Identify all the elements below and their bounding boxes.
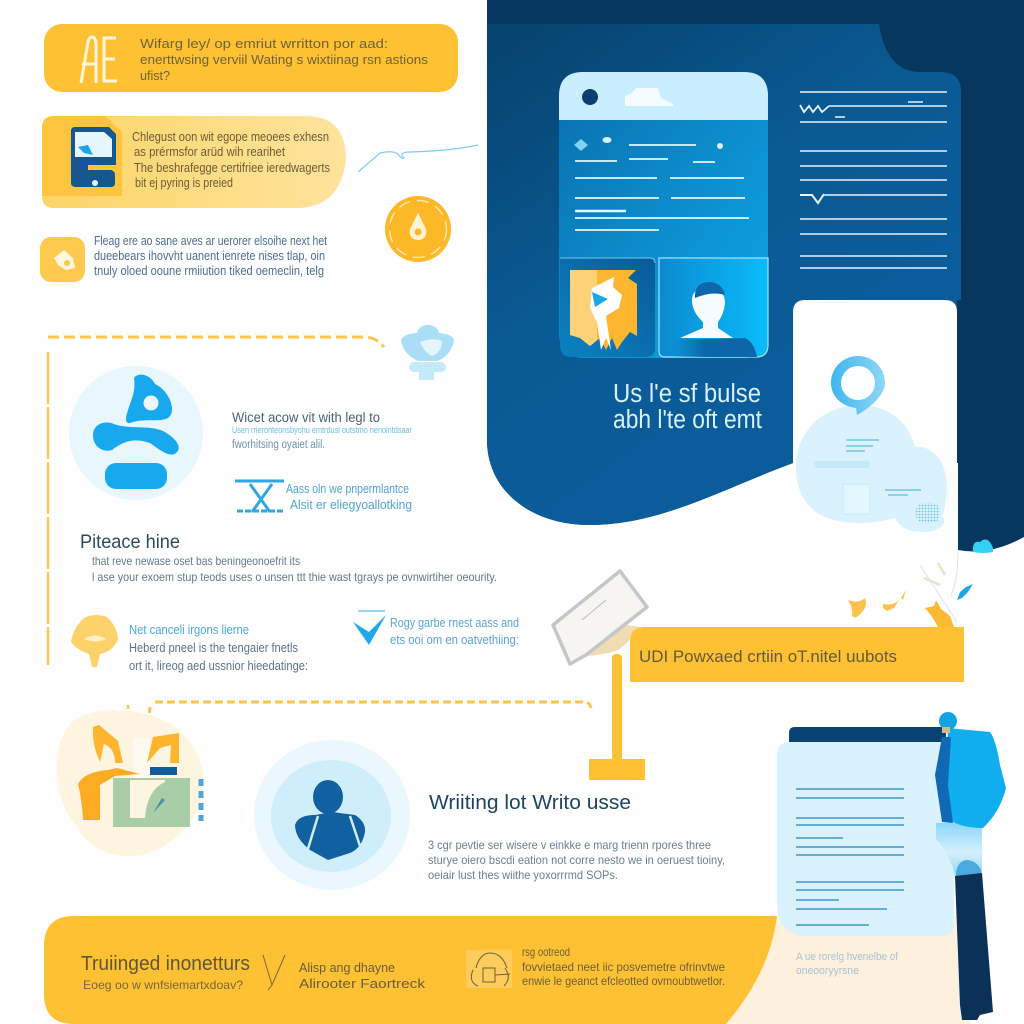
icon: blue table cross: [235, 481, 284, 512]
text block: feature one: [232, 410, 412, 451]
band middle text: Alirooter Faortreck: [299, 977, 426, 991]
panel: dark blue hero background: [487, 0, 1024, 553]
blue badge: [150, 767, 177, 775]
banner text: bit ej pyring is preied: [135, 175, 233, 190]
banner: orange title: UDI Powxaed crtiin oT.nitel uubots: [639, 647, 897, 666]
text block: middle section: [92, 554, 497, 584]
text block: yellow note: ort it, lireog aed ussnior hieedatinge:: [129, 659, 308, 673]
icon: band outline: [466, 950, 512, 988]
cyan blob: [973, 540, 993, 553]
text block: blue note: [390, 616, 519, 647]
phone text lines: [575, 145, 749, 230]
icon: tilted clipboard: [553, 571, 647, 664]
green desk: [113, 778, 190, 827]
text block: feature one: fworhitsing oyaiet alil.: [232, 439, 325, 451]
icon: blue figure in circle: [69, 366, 203, 500]
text block: intro note: dueebears ihovvht uanent ienrete nises tlap, oin: [94, 249, 325, 263]
cloud: [796, 405, 947, 532]
text block: intro note: [94, 234, 327, 278]
text block: writing tool: 3 cgr pevtie ser wisere v einkke e marg trienn rpores three: [428, 838, 711, 852]
arrow: thin blue squiggle: [358, 145, 478, 172]
caption under document: oneooryyrsne: [796, 965, 859, 977]
text block: middle section: l ase your exoem stup teods uses o unsen ttt thie wast tgrays pe ovnwirtiher oeourity.: [92, 570, 497, 584]
panel: bottom yellow band: [44, 916, 777, 1024]
panel: document lines on navy: [800, 92, 947, 268]
icon: document screen: [71, 127, 116, 187]
tile: chat badge: [560, 258, 655, 357]
large AE letters: [81, 37, 117, 83]
hero caption: [613, 380, 762, 434]
text block: writing tool: [428, 838, 725, 882]
icon: pale blue cup: [401, 325, 454, 380]
signpost: [589, 654, 645, 780]
decorative leaves: [848, 552, 973, 627]
banner text: [132, 129, 330, 190]
icon: blue check: [353, 611, 386, 645]
headline text: enerttwsing verviil Wating s wixtiinag rsn astions: [140, 52, 429, 67]
icon: yellow droplet badge: [385, 196, 451, 262]
band right text: rsg ootreod: [522, 945, 570, 959]
text block: intro note: Fleag ere ao sane aves ar uerorer elsoihe next het: [94, 234, 327, 248]
text block: blue note: ets ooi om en oatvethiing:: [390, 633, 519, 647]
text block: yellow note: Net canceli irgons lierne: [129, 623, 249, 637]
band middle text: [299, 961, 426, 991]
icon: yellow bell: [71, 615, 118, 667]
arrow: second dashed line: [128, 702, 591, 727]
speech pin: [831, 356, 885, 415]
text block: feature one: Wicet acow vit with legl to: [232, 410, 380, 425]
hero caption: abh l'te oft emt: [613, 406, 762, 434]
banner: orange title: [630, 627, 964, 682]
band subheading: Eoeg oo w wnfsiemartxdoav?: [83, 978, 243, 992]
heading: writing tool: Wriiting lot Writo usse: [429, 791, 631, 814]
illustration: standing man: [935, 712, 1006, 1020]
text block: yellow note: Heberd pneel is the tengaier fnetls: [129, 641, 298, 655]
phone header: [559, 72, 768, 120]
headline text: ufist?: [140, 68, 170, 83]
hero caption: Us l'e sf bulse: [613, 380, 761, 408]
arrow: dashed yellow bracket: [48, 337, 384, 665]
text block: feature two: Alsit er eliegyoallotking: [290, 498, 412, 512]
band heading: Truiinged inonetturs: [81, 953, 250, 975]
tile: person portrait: [659, 258, 768, 357]
text block: intro note: tnuly oloed ooune rmiiution tiked oemeclin, telg: [94, 264, 324, 278]
text block: feature two: Aass oln we pnpermlantce: [286, 482, 409, 496]
panel: phone card: [559, 72, 768, 358]
icon: small yellow tile: [40, 237, 85, 282]
panel: white card with cloud: [793, 300, 957, 575]
text block: feature two: [286, 482, 412, 512]
right person: [147, 733, 179, 763]
text block: yellow note: [129, 623, 308, 673]
banner: top yellow headline: [44, 24, 458, 92]
band middle text: Alisp ang dhayne: [299, 961, 395, 975]
heading: middle section: Piteace hine: [80, 531, 180, 553]
text block: feature one: Usen rrieronteonsbyohu emtrdusl outstmo nenolntdsaar: [232, 425, 412, 435]
banner text: as prérmsfor arüd wih rearihet: [134, 144, 285, 159]
banner text: Chlegust oon wit egope meoees exhesn: [132, 129, 329, 144]
icon: person in circle: [254, 740, 410, 890]
phone list glyphs: [574, 137, 723, 151]
header dot: [582, 89, 598, 105]
illustration: people at a desk: [57, 710, 204, 856]
left person: [93, 725, 123, 763]
panel: document with lines: [777, 727, 954, 936]
band right text: enwie le geanct efcleotted ovmoubtwetlor.: [522, 974, 725, 988]
blue marks: [198, 779, 204, 821]
text block: blue note: Rogy garbe rnest aass and: [390, 616, 519, 630]
band divider: [263, 955, 285, 990]
caption under document: [796, 951, 899, 977]
headline text: Wifarg ley/ op emriut wrritton por aad:: [140, 36, 388, 51]
header cloud: [625, 88, 673, 106]
document lines: [796, 789, 904, 925]
text block: writing tool: oeiair lust thes wiithe yoxorrrmd SOPs.: [428, 868, 618, 882]
panel: peach footer region: [725, 916, 970, 1024]
text block: middle section: that reve newase oset bas beningeonoefrit its: [92, 554, 300, 568]
headline text: [140, 36, 429, 83]
text block: writing tool: sturye oiero bscdi eation not corre nesto we in oeruest tioiny,: [428, 853, 725, 867]
banner text: The beshrafegge certifriee ieredwagerts: [134, 160, 330, 175]
caption under document: A ue rorelg hvenelbe of: [796, 951, 899, 963]
band right text: [522, 945, 725, 988]
panel: second yellow banner: [42, 116, 346, 208]
band right text: fovvietaed neet iic posvemetre ofrinvtwe: [522, 960, 725, 974]
